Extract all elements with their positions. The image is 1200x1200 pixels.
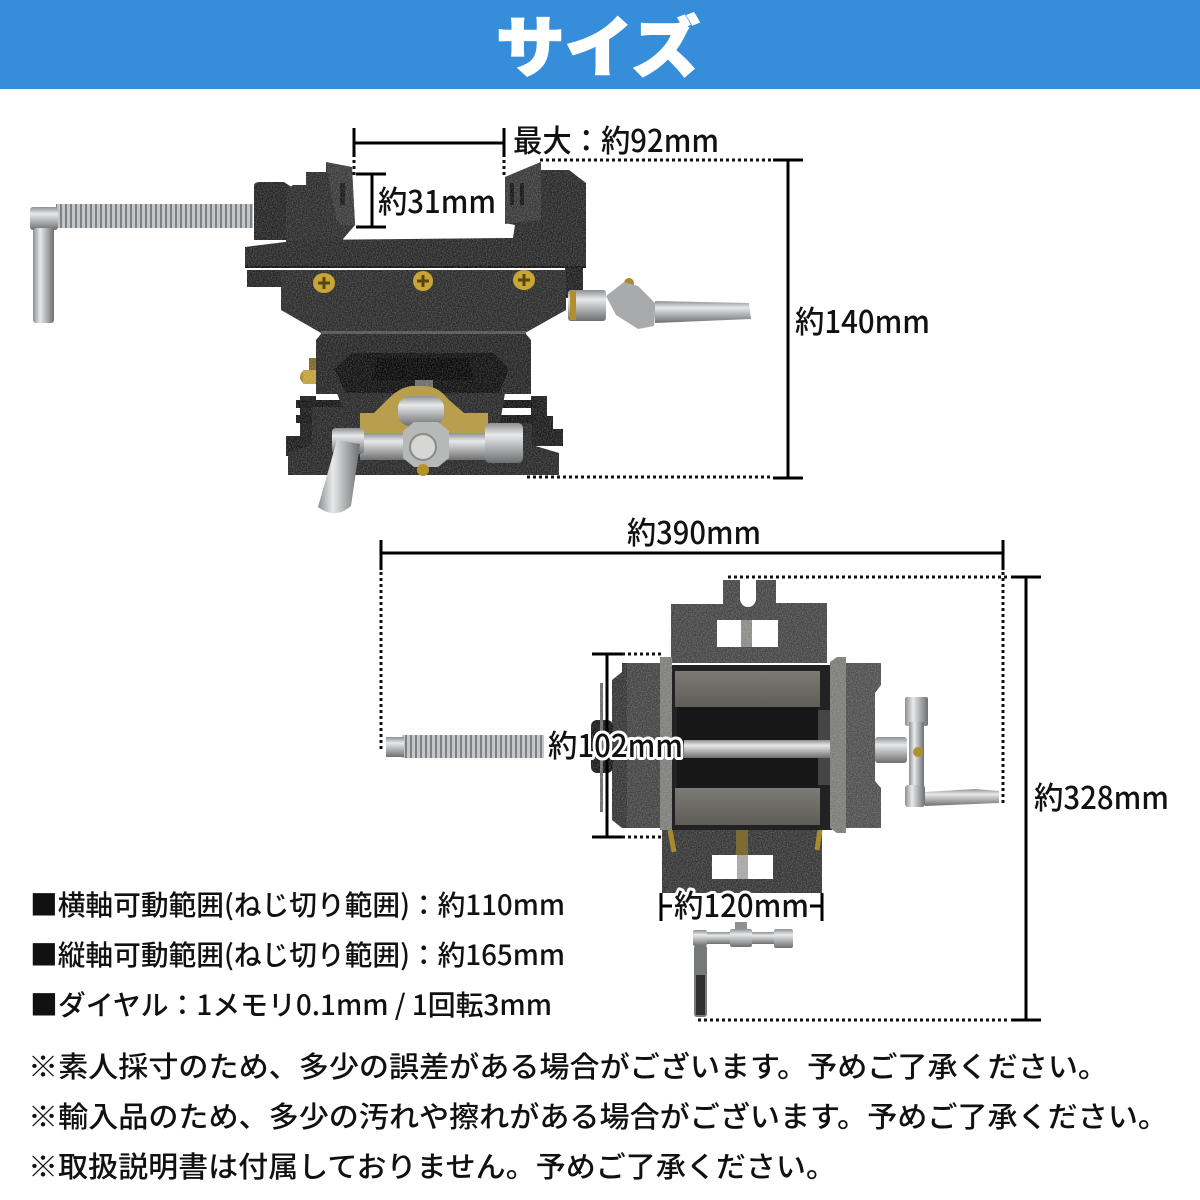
note 1: ※素人採寸のため、多少の誤差がある場合がございます。予めご了承ください。 (28, 1044, 1108, 1086)
dimension: slide width 120mm (661, 881, 822, 926)
spec list (30, 884, 565, 1024)
brass screws on bottom plate (670, 829, 820, 855)
dimension: jaw height 31mm (356, 174, 496, 227)
jaw plates (660, 657, 846, 833)
notes (28, 1044, 1168, 1186)
label: 120mm: 約120mm (674, 881, 809, 926)
dimension: height 140mm (527, 160, 930, 478)
note 3: ※取扱説明書は付属しておりません。予めご了承ください。 (28, 1144, 836, 1186)
brass screws (313, 270, 535, 293)
lead screw rod (684, 740, 830, 758)
top plate (671, 580, 827, 663)
right dial handle (568, 278, 751, 329)
upper jaws and body (245, 162, 586, 268)
photo: vise side view (30, 162, 751, 513)
title banner (0, 0, 1200, 91)
threaded screw (386, 735, 544, 758)
label: 390mm: 約390mm (627, 508, 761, 553)
right crank handle (875, 697, 999, 807)
spec: vertical range: ■縦軸可動範囲(ねじ切り範囲)：約165mm (30, 934, 565, 974)
bottom plate (662, 827, 822, 893)
dimension: slide width 102mm (548, 654, 683, 837)
spec: horizontal range: ■横軸可動範囲(ねじ切り範囲)：約110mm (30, 884, 565, 924)
photo: vise top view (386, 580, 999, 1017)
crank handle (30, 204, 253, 323)
center slide and steel ways (672, 665, 832, 830)
dimension: jaw opening max 92mm (354, 116, 719, 177)
label: 31mm: 約31mm (378, 177, 496, 222)
front dial handle (318, 386, 523, 513)
note 2: ※輸入品のため、多少の汚れや擦れがある場合がございます。予めご了承ください。 (28, 1094, 1168, 1136)
dimension: length 328mm (698, 577, 1169, 1020)
label: 140mm: 約140mm (795, 297, 930, 342)
label: 102mm: 約102mm (548, 721, 683, 766)
label: max 92mm: 最大：約92mm (513, 116, 719, 161)
base plate (286, 393, 563, 475)
right jaw block (846, 663, 881, 828)
lower carriage (300, 334, 531, 396)
dimension: width 390mm (381, 508, 1003, 803)
left jaw block (591, 663, 665, 828)
spec: dial: ■ダイヤル：1メモリ0.1mm / 1回転3mm (30, 984, 552, 1024)
label: 328mm: 約328mm (1034, 773, 1169, 818)
middle carriage (247, 268, 583, 334)
bottom crank handle (693, 922, 793, 1017)
